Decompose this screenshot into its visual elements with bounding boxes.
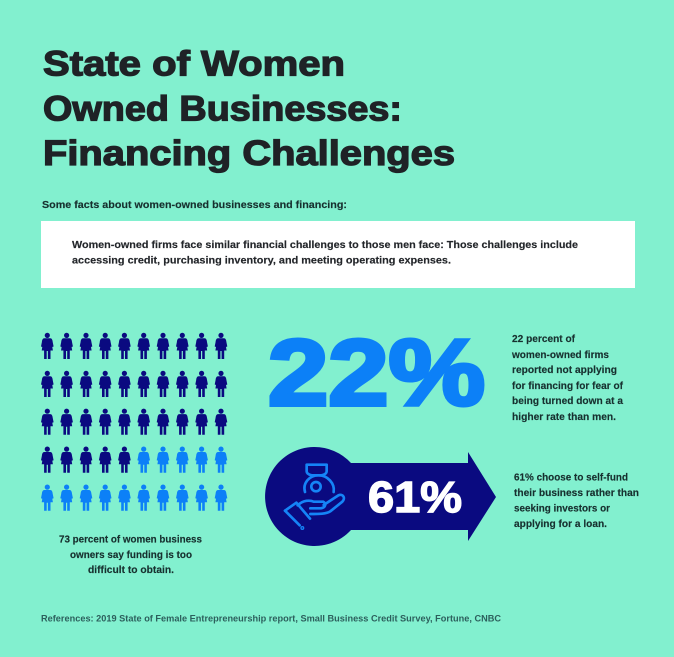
61% description: 61% choose to self-fund bbox=[514, 472, 628, 484]
pictogram caption: 73 percent of women business bbox=[59, 534, 202, 546]
22% description: women-owned firms bbox=[511, 349, 609, 361]
61% description: their business rather than bbox=[514, 487, 639, 499]
title: Financing Challenges bbox=[43, 134, 455, 173]
panel: key challenge callout bbox=[41, 221, 635, 288]
icon: hand holding money bag bbox=[285, 465, 344, 529]
subheading: Some facts about women-owned businesses and financing: bbox=[42, 199, 347, 211]
arrow shape bbox=[265, 447, 496, 546]
callout text bbox=[72, 239, 578, 266]
callout text: accessing credit, purchasing inventory, and meeting operating expenses. bbox=[72, 254, 451, 266]
61% description: applying for a loan. bbox=[514, 518, 607, 530]
22% description: higher rate than men. bbox=[512, 411, 616, 423]
title: State of Women bbox=[43, 44, 345, 84]
22% description: being turned down at a bbox=[512, 395, 623, 407]
arrow badge: 61% bbox=[265, 447, 496, 546]
pictogram caption bbox=[59, 534, 202, 576]
22% description bbox=[511, 333, 623, 423]
big stat: 22%: 22% bbox=[268, 320, 485, 425]
title: Owned Businesses: bbox=[43, 90, 402, 128]
pictogram caption: difficult to obtain. bbox=[88, 564, 174, 576]
61% figure: 61% bbox=[368, 473, 462, 522]
22% description: 22 percent of bbox=[512, 333, 575, 345]
22% description: reported not applying bbox=[512, 364, 617, 376]
22% description: for financing for fear of bbox=[512, 380, 623, 392]
references: References: 2019 State of Female Entrepreneurship report, Small Business Credit Survey, Fortune, CNBC bbox=[41, 614, 501, 624]
61% description bbox=[514, 472, 639, 530]
callout text: Women-owned firms face similar financial challenges to those men face: Those challenges include bbox=[72, 239, 578, 251]
title bbox=[43, 44, 455, 173]
61% description: seeking investors or bbox=[514, 502, 610, 514]
pictogram caption: owners say funding is too bbox=[70, 549, 192, 561]
pictogram: 73 of 100 women bbox=[41, 333, 227, 511]
